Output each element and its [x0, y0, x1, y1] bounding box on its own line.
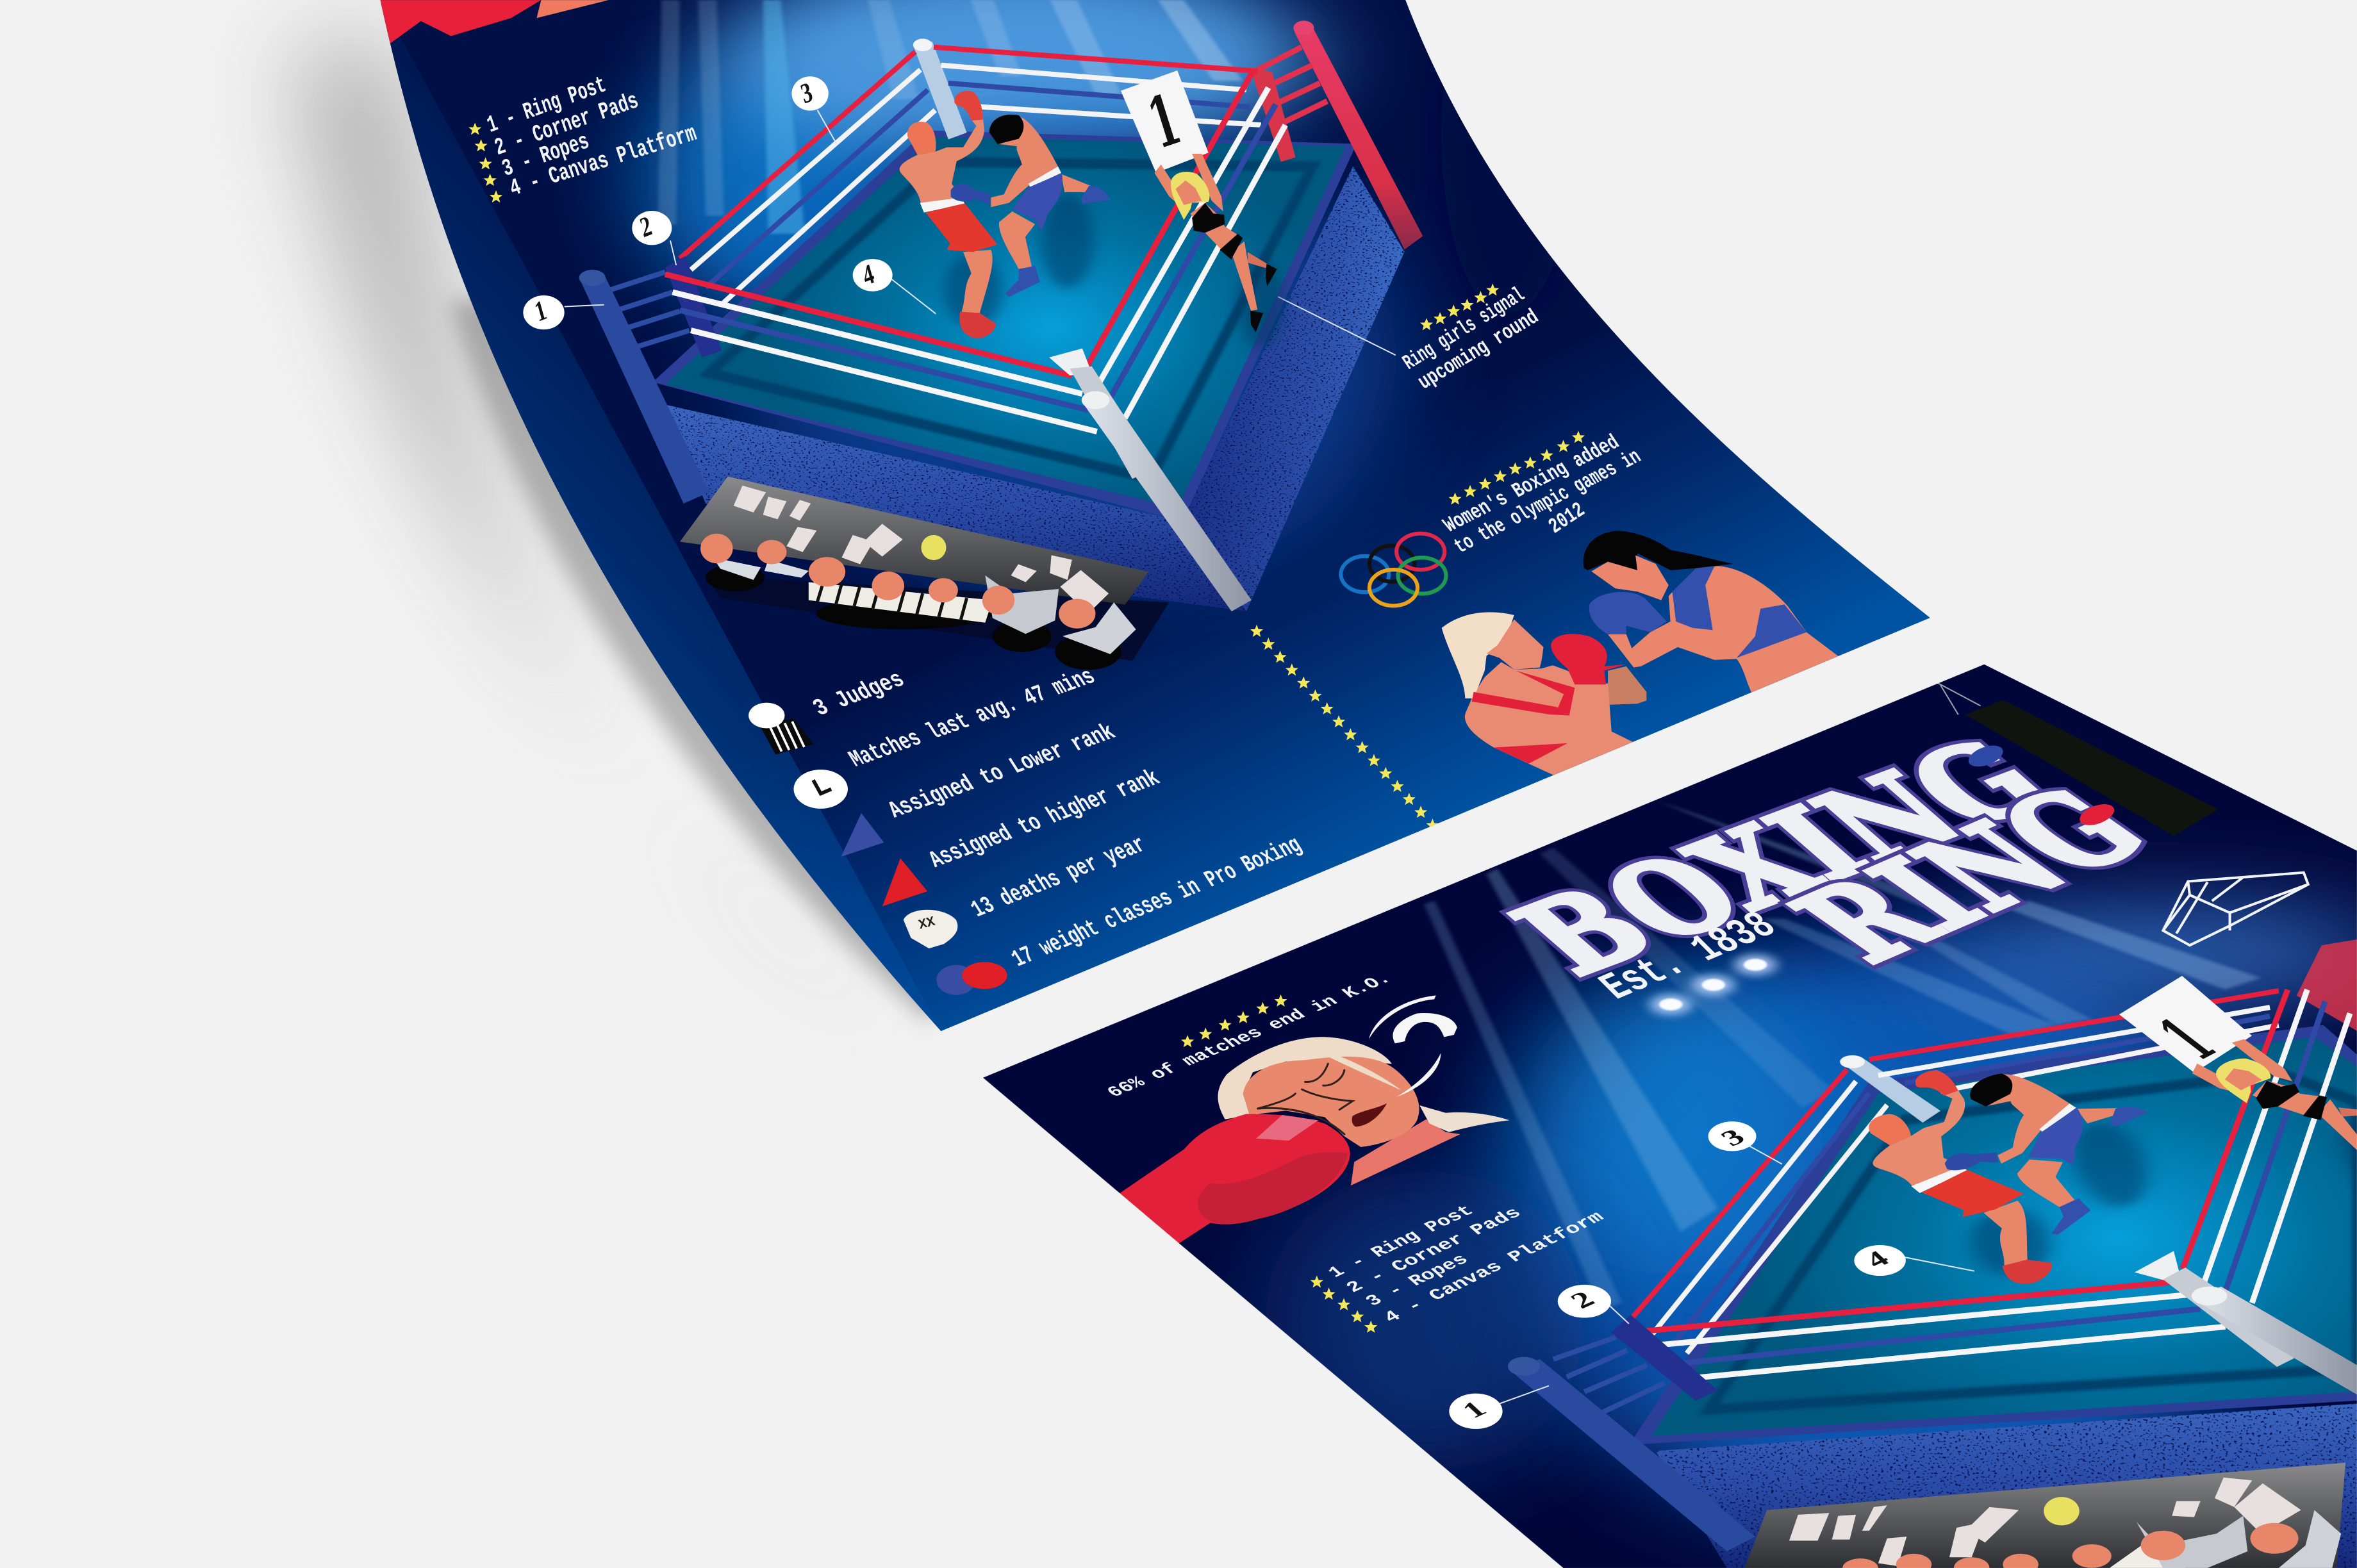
bubble 3 [1708, 1121, 1757, 1151]
icon: skull: XX [917, 914, 937, 933]
red shorts boxer [900, 91, 998, 338]
stats list: 17 weight classes in Pro Boxing [1006, 831, 1307, 973]
top legend: 4 - Canvas Platform [506, 120, 700, 202]
dotted star divider [1250, 625, 1439, 830]
back post [1840, 939, 2357, 1123]
callout leaders [565, 110, 1396, 355]
lower illustration [1264, 682, 2357, 1568]
knockout stat: 66% of matches end in K.O. [1103, 970, 1396, 1101]
callout leaders [1500, 1143, 1974, 1403]
white corner post [2135, 1251, 2357, 1395]
lower sheet [962, 647, 2357, 1568]
callout: ring girls: Ring girls signal [1399, 284, 1530, 375]
lower legend: 2 - Corner Pads [1342, 1205, 1526, 1296]
bubble numbers: 1 [1456, 1396, 1493, 1423]
top ring illustration [523, 0, 1574, 670]
bubble 3 [791, 76, 829, 111]
ring glows [647, 0, 1574, 593]
judges table [680, 477, 1169, 670]
face [1243, 1049, 1419, 1147]
stats list: 3 Judges [808, 667, 910, 722]
apron left face [665, 404, 1246, 611]
icon: gloves [936, 962, 1007, 995]
blonde boxer [1442, 612, 1646, 777]
top legend: 2 - Corner Pads [492, 87, 642, 162]
corner pads and blue post [1508, 1315, 1755, 1551]
subtitle: Est. 1838 [1590, 905, 1788, 1009]
bubble 1 [1449, 1394, 1503, 1429]
white corner post [1049, 349, 1252, 611]
apron [1656, 1403, 2357, 1568]
icon: skull [904, 910, 957, 948]
icon: ring wireframe [2163, 873, 2308, 945]
bubble numbers: 1 [532, 295, 550, 328]
title: RING [1761, 768, 2181, 984]
bubble 4 [853, 259, 893, 292]
hair [1218, 1037, 1509, 1132]
round card [1121, 70, 1209, 173]
figures on lower sheet [1836, 936, 2357, 1320]
canvas [652, 130, 1357, 522]
top sheet [381, 0, 1930, 1031]
front ropes [665, 70, 1286, 432]
icon: referee [748, 703, 813, 755]
bubble 4 [1854, 1245, 1906, 1276]
back red rope connectors [1253, 47, 1327, 124]
lower legend: 1 - Ring Post [1323, 1202, 1478, 1282]
top legend: 1 - Ring Post [484, 72, 609, 140]
stats list [748, 664, 1307, 995]
stats list: Matches last avg. 47 mins [845, 664, 1101, 773]
callout: ring girls: upcoming round [1414, 305, 1543, 395]
lower legend: 3 - Ropes [1361, 1251, 1473, 1310]
bubble numbers: 3 [1714, 1124, 1751, 1151]
title: BOXING [1484, 718, 2078, 997]
women boxers [1442, 531, 1843, 777]
bubble numbers [1456, 1124, 1896, 1423]
lower background [962, 647, 2357, 1568]
knockout illustration [1112, 995, 1509, 1250]
glows [1264, 901, 2357, 1528]
mouthguard and impact lines [1369, 995, 1457, 1097]
blue shorts boxer [989, 115, 1111, 297]
callout: olympic: to the olympic games in [1450, 445, 1646, 559]
judges table [1744, 1463, 2345, 1568]
bubble numbers: 3 [798, 77, 816, 110]
stats list: Assigned to Lower rank [884, 720, 1121, 825]
bubble 2 [632, 211, 672, 245]
icon: olympic rings [1341, 534, 1446, 606]
bubble 1 [523, 295, 565, 329]
neck [1351, 1119, 1460, 1185]
card number: 1 [1139, 78, 1189, 165]
top legend: 3 - Ropes [499, 128, 593, 183]
spotlights [1650, 954, 1776, 1015]
light beams [1424, 800, 2261, 1309]
sheet gradient [381, 0, 1930, 1031]
bubble numbers: 2 [637, 211, 655, 243]
icon: blue triangle [841, 813, 884, 857]
stats list: Assigned to higher rank [924, 765, 1166, 874]
corner pads and blue post [579, 256, 722, 504]
icon: clock [794, 770, 848, 809]
apron right face [1184, 167, 1405, 611]
title: RING [1761, 768, 2181, 984]
ring girl [1154, 154, 1277, 332]
lower card number: 1 [2142, 1006, 2234, 1073]
bubble 2 [1558, 1285, 1611, 1318]
callout: olympic: Women's Boxing added [1439, 431, 1624, 538]
back ropes [1625, 991, 2279, 1353]
bubble numbers: 4 [859, 259, 877, 292]
top legend [468, 72, 700, 202]
sheet shadow [293, 45, 962, 1037]
back posts [913, 21, 1423, 249]
bubble numbers: 4 [1859, 1246, 1896, 1273]
title: BOXING [1484, 718, 2078, 997]
corner glove on top sheet [380, 0, 609, 45]
lower legend [1311, 1202, 1609, 1333]
dark haired boxer [1584, 531, 1843, 697]
bubble numbers [532, 77, 877, 328]
light beams [657, 0, 1243, 234]
figures: boxers, round card and ring girl [900, 70, 1284, 348]
punching bag [1936, 682, 2218, 836]
icon: red triangle [882, 858, 927, 906]
back ropes [680, 47, 1261, 306]
glove [1112, 1114, 1350, 1250]
lower legend: 4 - Canvas Platform [1380, 1209, 1609, 1326]
front ropes [1616, 989, 2350, 1380]
bubble numbers: 2 [1564, 1287, 1601, 1314]
stats list: 13 deaths per year [966, 832, 1152, 924]
canvas [1629, 1025, 2357, 1445]
callout: olympic: 2012 [1544, 497, 1589, 539]
